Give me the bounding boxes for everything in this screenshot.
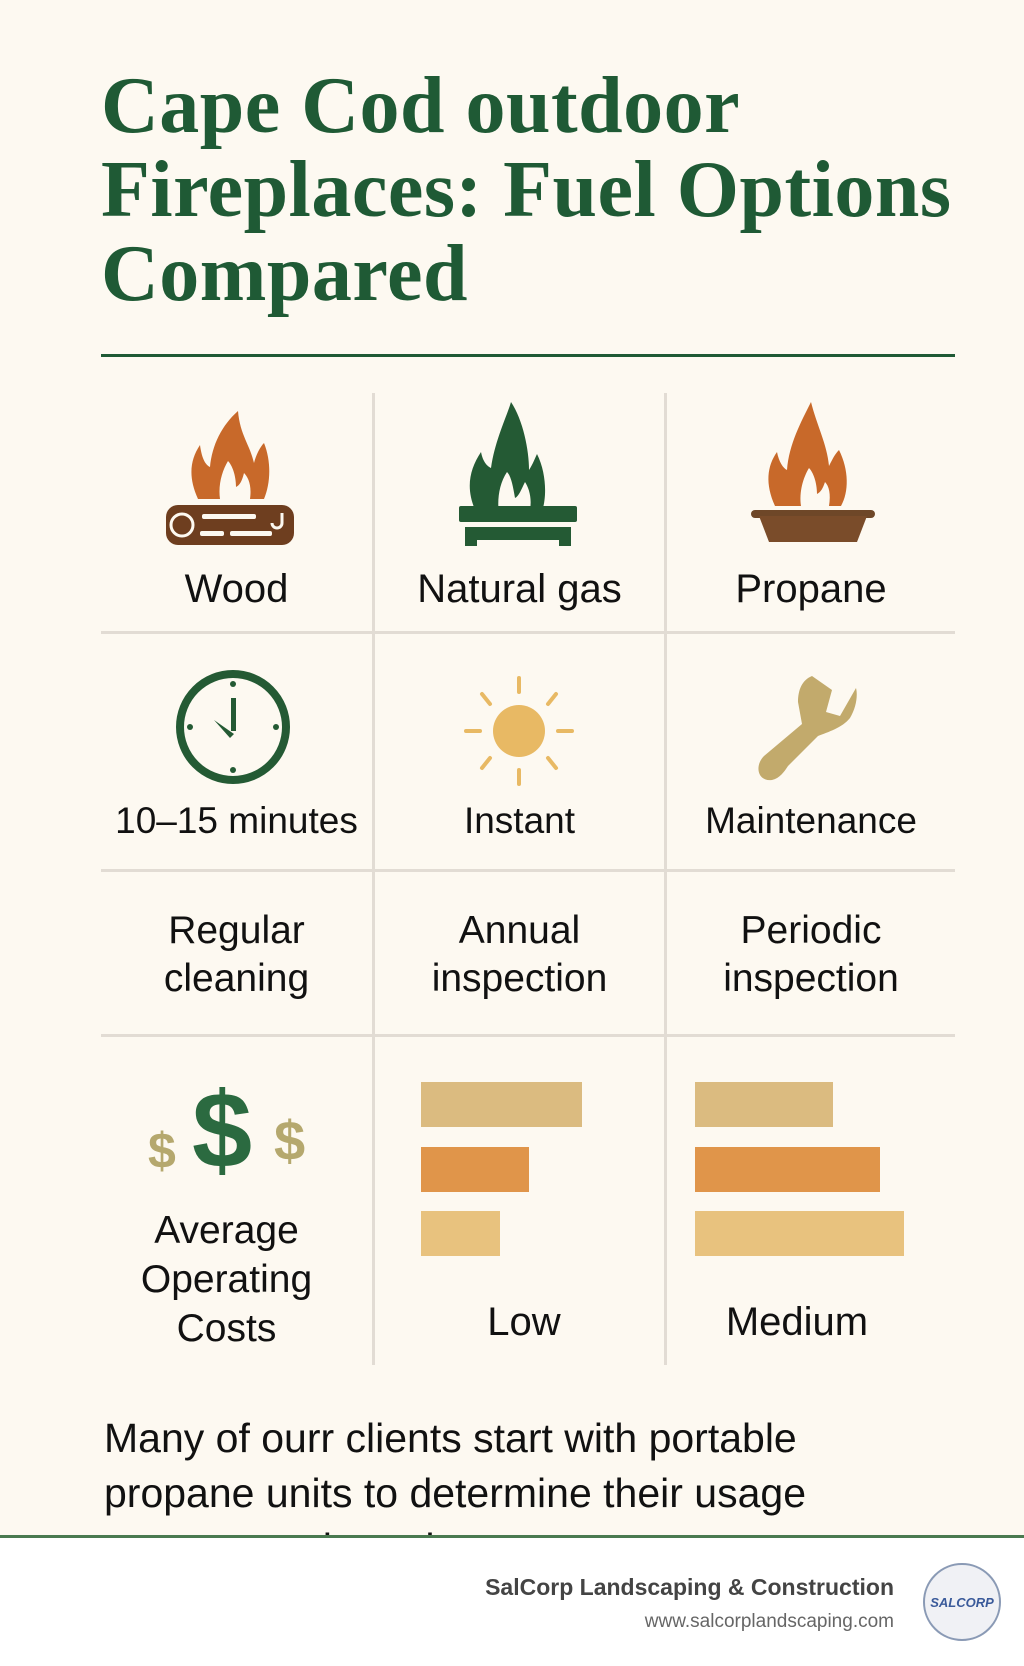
bar chart: propane: [695, 1082, 904, 1256]
comparison grid: [101, 393, 955, 1365]
label: maintenance: Maintenance: [705, 800, 917, 841]
text: average operating costs: [141, 1209, 312, 1350]
icon: wood fire: [166, 411, 294, 545]
icon: dollar signs: [148, 1069, 305, 1190]
text: periodic inspection: [723, 909, 899, 1000]
text: average operating costs: Operating: [141, 1258, 312, 1301]
footer url: www.salcorplandscaping.com: [645, 1611, 894, 1632]
text: regular cleaning: cleaning: [164, 957, 309, 1000]
text: regular cleaning: Regular: [168, 909, 305, 952]
icon: natural gas flame: [459, 402, 577, 546]
icon: dollar signs: $: [274, 1109, 305, 1172]
text: periodic inspection: Periodic: [741, 909, 881, 952]
logo: SALCORP: [930, 1595, 994, 1610]
text: average operating costs: Average: [154, 1209, 299, 1252]
label: medium: Medium: [726, 1300, 868, 1344]
paragraph: Many of ourr clients start with portable propane units to determine their usage patterns and needs: [104, 1415, 806, 1571]
icon: propane bowl flame: [751, 402, 875, 542]
icon: wrench: [758, 676, 857, 780]
footer: [0, 1535, 1024, 1666]
logo: [923, 1563, 1001, 1641]
label: low: Low: [487, 1300, 561, 1344]
text: periodic inspection: inspection: [723, 957, 899, 1000]
text: annual inspection: Annual: [459, 909, 580, 952]
label: instant: Instant: [464, 800, 575, 841]
icon: dollar signs: $: [192, 1069, 252, 1190]
label: natural gas: Natural gas: [417, 567, 622, 611]
label: wood: Wood: [185, 567, 288, 611]
bar chart: natural gas: [421, 1082, 582, 1256]
icon: clock: [176, 670, 290, 784]
icon: sun: [464, 676, 574, 786]
text: regular cleaning: [164, 909, 309, 1000]
text: average operating costs: Costs: [177, 1307, 276, 1350]
footer company name: SalCorp Landscaping & Construction: [485, 1574, 894, 1600]
text: annual inspection: [432, 909, 607, 1000]
text: annual inspection: inspection: [432, 957, 607, 1000]
label: 10-15 minutes: 10–15 minutes: [115, 800, 358, 841]
icon: dollar signs: $: [148, 1123, 176, 1179]
label: propane: Propane: [735, 567, 887, 611]
title: Cape Cod outdoor Fireplaces: Fuel Options Compared: [101, 62, 951, 318]
